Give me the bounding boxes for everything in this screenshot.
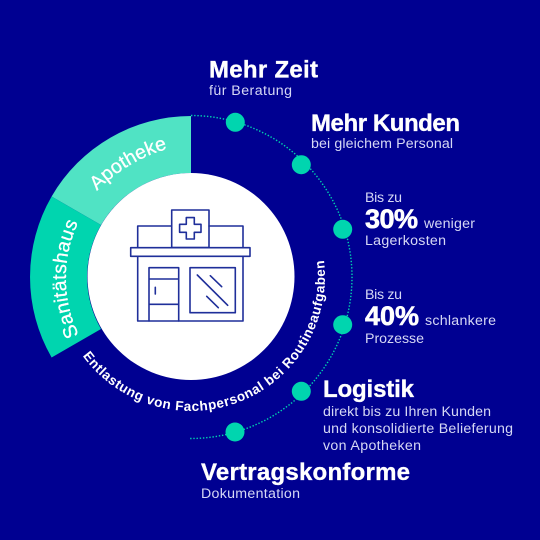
text: Vertragskonforme Dokumentation [201,459,410,502]
text: Mehr Kunden [311,110,460,152]
text: 30% weniger Lagerkosten: Lagerkosten [365,233,446,249]
text: 40% schlankere Prozesse: Prozesse [365,331,424,347]
text: 30% weniger Lagerkosten: Bis zu [365,190,402,206]
text: Mehr Kunden: Mehr Kunden [311,110,460,137]
ring segment: Apotheke [52,116,191,225]
curved caption: Entlastung von Fachpersonal bei Routineaufgaben [83,261,326,412]
text: 30% weniger Lagerkosten: 30% [365,204,418,234]
dotted timeline arc [190,116,352,439]
text: Logistik: Logistik [323,376,415,403]
text: 40% schlankere Prozesse [365,287,496,347]
timeline dot 2 [292,155,311,174]
timeline dot 5 [292,382,311,401]
text: 30% weniger Lagerkosten [365,190,475,249]
text: Mehr Zeit [209,56,318,99]
text: Vertragskonforme Dokumentation: Dokumentation [201,486,300,502]
text: Logistik: direkt bis zu Ihren Kunden [323,404,491,420]
icon: pharmacy storefront [131,210,250,321]
text: 30% weniger Lagerkosten: weniger [423,216,475,232]
timeline dot 3 [333,220,352,239]
text: Mehr Zeit: für Beratung [209,83,292,99]
text: Logistik: und konsolidierte Belieferung [323,421,513,437]
text: Mehr Kunden: bei gleichem Personal [311,136,453,152]
text: Logistik [323,376,513,454]
timeline dot 6 [226,422,244,442]
text: Vertragskonforme Dokumentation: Vertragskonforme [201,459,410,486]
white centre circle [88,173,294,380]
ring segment: Sanitätshaus: Sanitätshaus [52,220,78,338]
ring segment: Apotheke: Apotheke [92,140,166,192]
text: 40% schlankere Prozesse: Bis zu [365,287,402,303]
text: Mehr Zeit: Mehr Zeit [209,56,318,84]
text: 40% schlankere Prozesse: schlankere [425,313,496,329]
text: 40% schlankere Prozesse: 40% [365,301,419,331]
ring segment: Sanitätshaus [30,196,101,358]
text: Logistik: von Apotheken [323,438,421,454]
timeline dot 4 [333,315,352,334]
timeline dot 1 [226,113,245,132]
